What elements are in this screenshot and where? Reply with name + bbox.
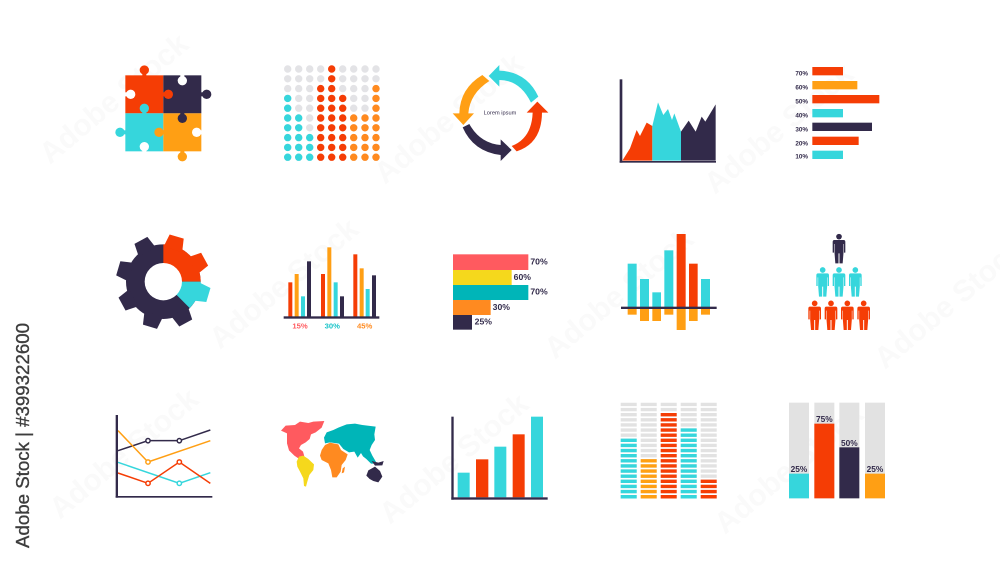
- diverging bar chart: [621, 234, 717, 330]
- faint background watermarks: Adobe Stock: [538, 222, 700, 365]
- world map: [281, 421, 384, 487]
- stacked horizontal bars: 70%: [530, 287, 548, 297]
- percentage bars: 50%: [841, 438, 858, 448]
- stacked horizontal bars: 30%: [493, 302, 510, 312]
- icon: gear: [116, 234, 211, 329]
- center label: Lorem ipsum: [484, 111, 517, 117]
- horizontal bar chart: 10%: [795, 154, 808, 161]
- horizontal bar chart: 60%: [795, 85, 808, 92]
- arrow: red: [512, 102, 548, 151]
- stacked horizontal bars: 60%: [514, 272, 531, 282]
- faint background watermarks: Adobe Stock: [203, 212, 365, 355]
- arrow: dark: [463, 124, 512, 161]
- percentage bars: [789, 403, 885, 498]
- horizontal bar chart: [795, 67, 879, 161]
- stacked horizontal bars: [453, 254, 548, 330]
- horizontal bar chart: 20%: [795, 141, 808, 148]
- area chart: [620, 79, 716, 163]
- arrow: teal: [489, 65, 538, 103]
- percentage bars: 25%: [791, 464, 808, 474]
- faint background watermarks: Adobe Stock: [708, 397, 870, 540]
- horizontal bar chart: 30%: [795, 127, 808, 134]
- faint background watermarks: Adobe Stock: [33, 27, 195, 170]
- stacked horizontal bars: 25%: [475, 317, 492, 327]
- percentage bars: 25%: [867, 464, 884, 474]
- line chart: [116, 415, 212, 498]
- arrow: orange: [453, 75, 489, 125]
- people pyramid: [808, 234, 870, 330]
- segmented bar chart: [629, 403, 709, 498]
- grouped bar chart: 45%: [357, 322, 373, 331]
- faint background watermarks: Adobe Stock: [43, 382, 205, 525]
- grouped bar chart: 30%: [325, 322, 340, 331]
- horizontal bar chart: 70%: [795, 71, 808, 78]
- faint background watermarks: Adobe Stock: [373, 387, 535, 530]
- stacked horizontal bars: 70%: [530, 257, 548, 267]
- horizontal bar chart: 50%: [795, 99, 808, 106]
- cycle diagram: [453, 65, 548, 161]
- percentage bars: 75%: [816, 414, 833, 424]
- horizontal bar chart: 40%: [795, 113, 808, 120]
- faint background watermarks: Adobe Stock: [368, 47, 530, 190]
- column chart: [451, 417, 548, 500]
- icon: puzzle: [115, 65, 211, 161]
- grouped bar chart: 15%: [292, 322, 308, 331]
- grouped bar chart: [284, 247, 379, 331]
- faint background watermarks: Adobe Stock: [698, 57, 860, 200]
- watermark id: Adobe Stock | #399322600: [13, 323, 33, 548]
- dot matrix chart: [288, 69, 376, 158]
